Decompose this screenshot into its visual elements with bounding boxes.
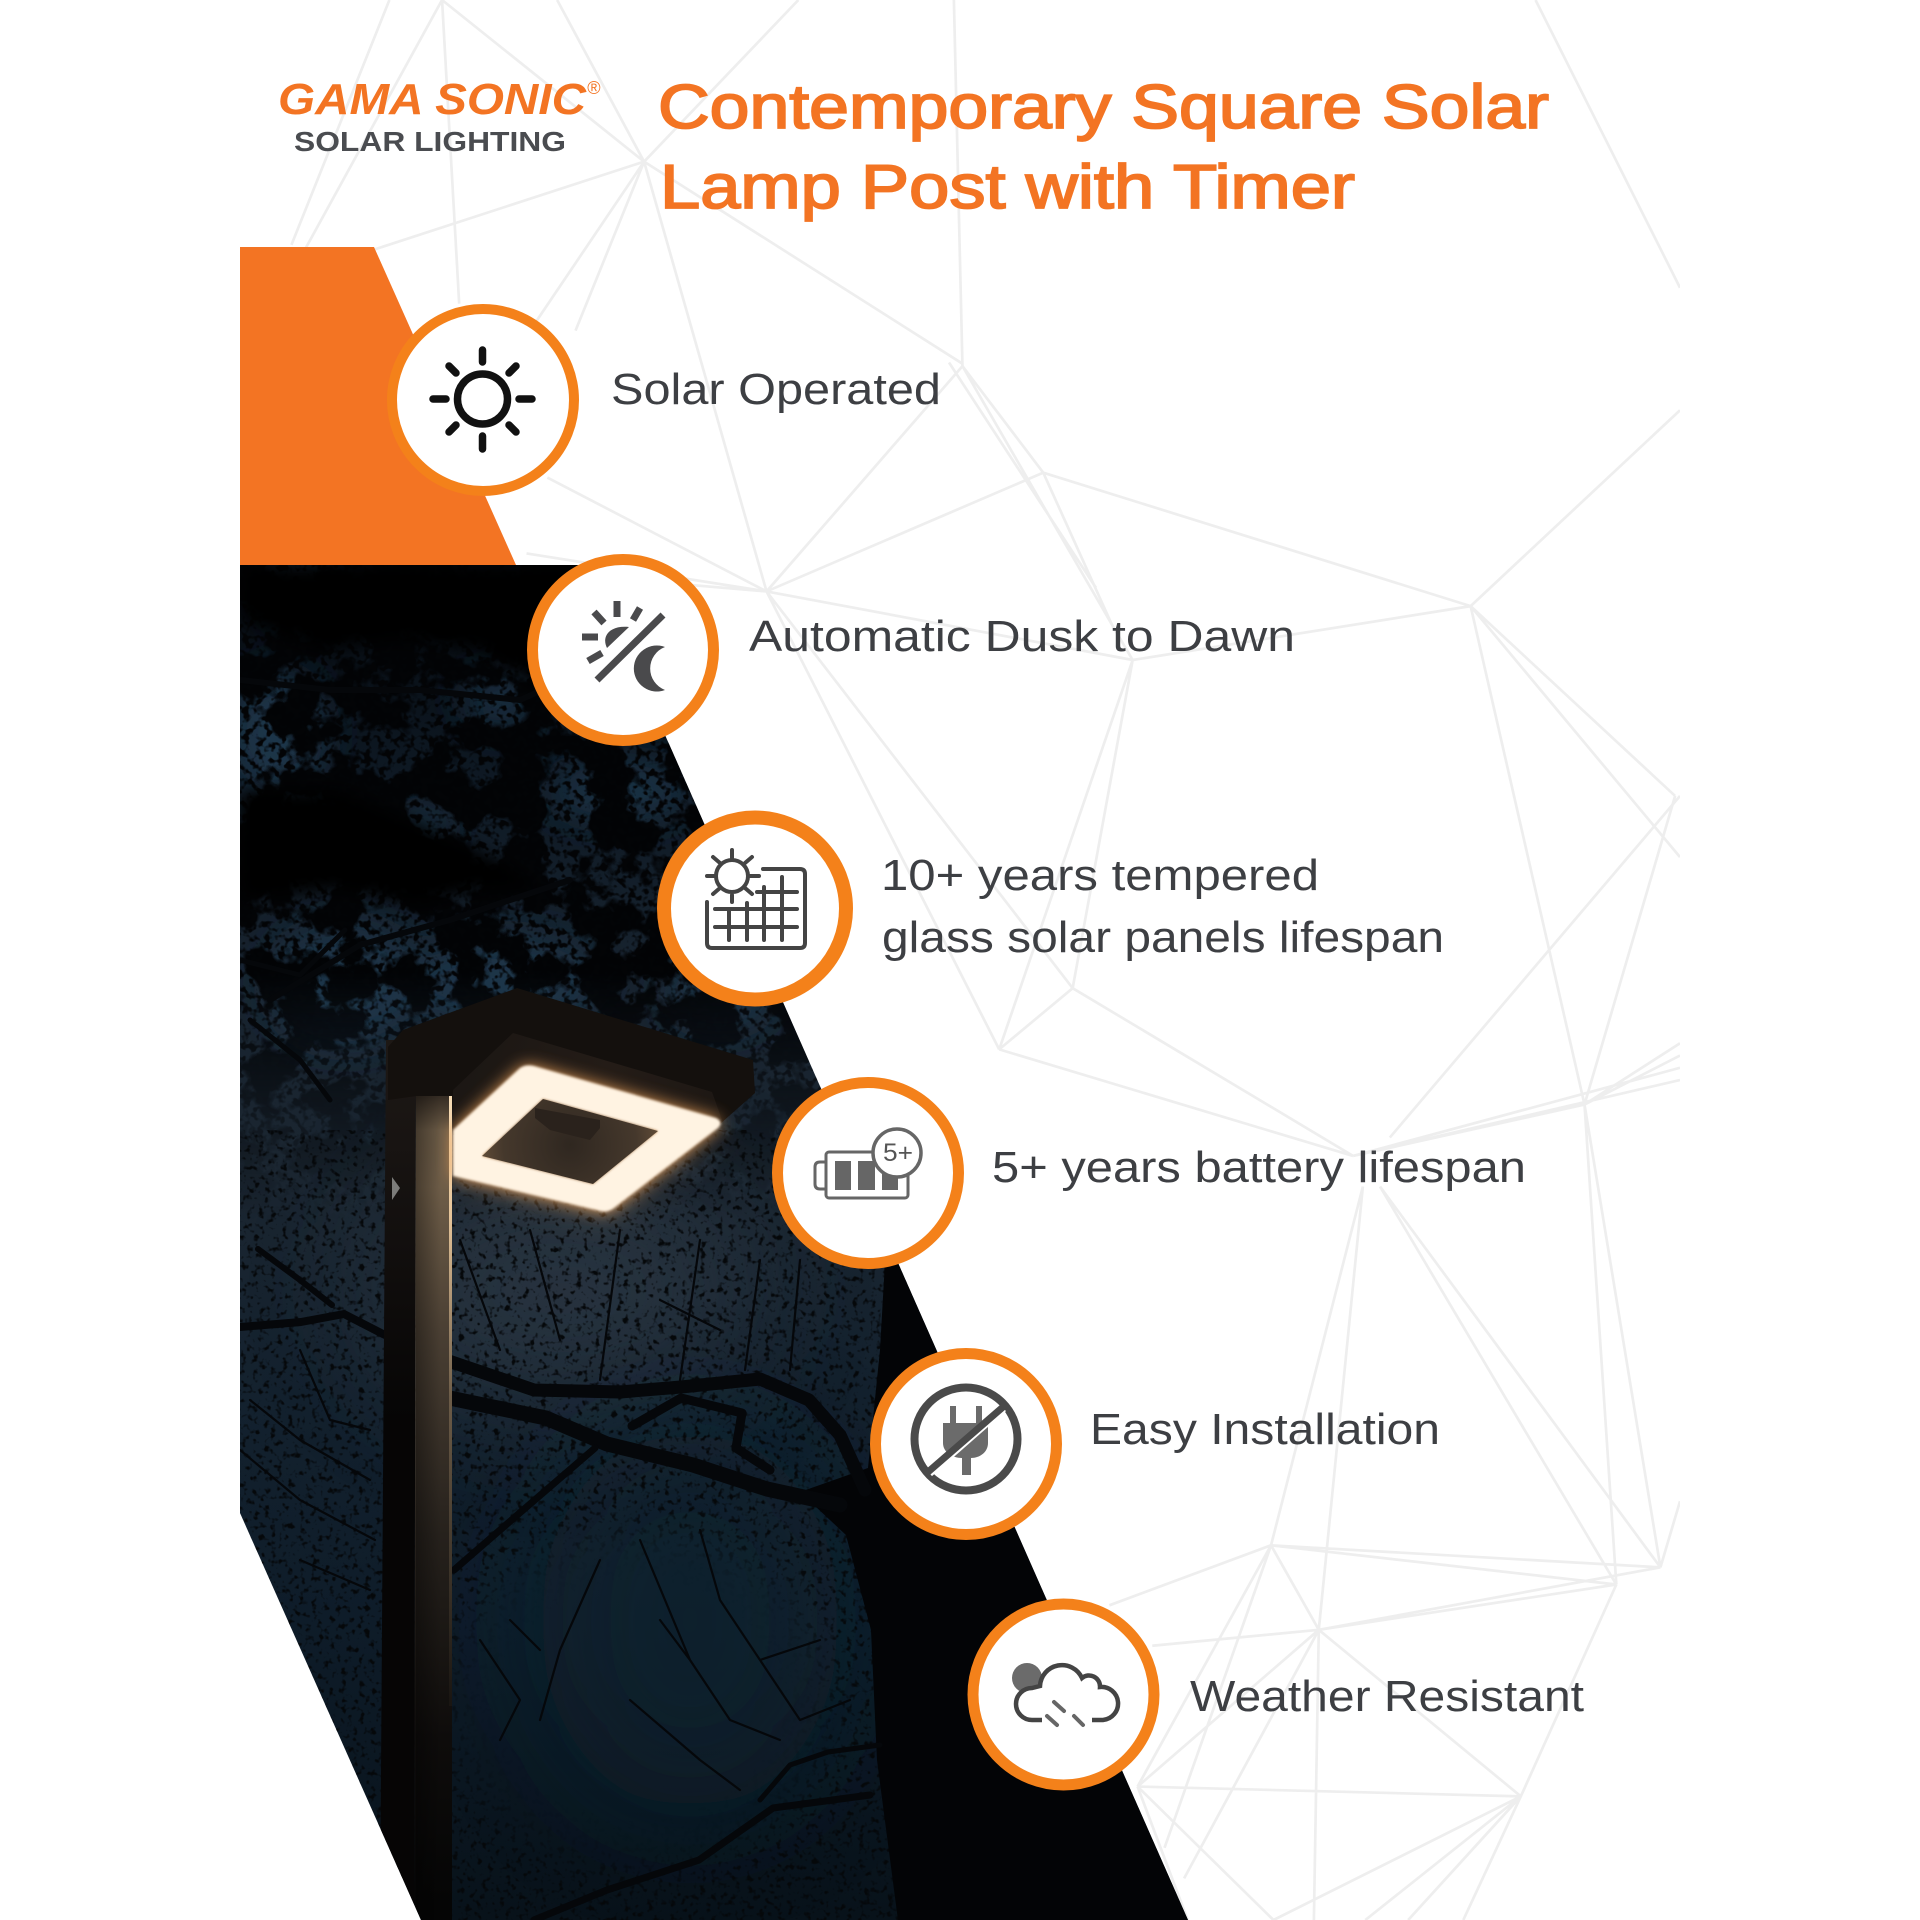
feature: solar panel lifespan — [664, 818, 1444, 1000]
icon: sun and moon — [582, 601, 665, 692]
title: Contemporary Square Solar — [658, 73, 1549, 142]
feature: automatic dusk to dawn: Automatic Dusk to Dawn — [749, 612, 1295, 661]
title — [658, 73, 1549, 222]
brand logo — [278, 75, 601, 157]
lamp glow on sky — [452, 1110, 719, 1226]
icon: rain cloud — [1012, 1663, 1118, 1725]
lamp head underside — [456, 1034, 720, 1116]
feature: solar operated — [392, 309, 941, 491]
icon: battery with 5+ badge: 5+ — [883, 1139, 913, 1167]
tree foliage texture — [240, 565, 1000, 1920]
icon: no plug — [914, 1388, 1018, 1490]
background network pattern — [291, 0, 1680, 1920]
feature: easy installation — [876, 1354, 1440, 1534]
feature: automatic dusk to dawn — [532, 560, 1295, 740]
tree branches — [240, 660, 880, 1920]
icon: battery with 5+ badge — [815, 1129, 921, 1198]
infographic canvas — [240, 0, 1680, 1920]
pole dark side — [380, 1040, 416, 1920]
brand logo: GAMA SONIC — [278, 75, 587, 124]
photo sky — [227, 564, 1200, 1920]
lamp light ring — [453, 1065, 721, 1212]
icon: solar panel with sun — [707, 850, 805, 948]
feature: weather resistant — [973, 1604, 1584, 1785]
lamp head housing — [388, 988, 755, 1140]
feature: solar panel lifespan: glass solar panels lifespan — [882, 913, 1444, 962]
feature: solar panel lifespan: 10+ years tempered — [881, 851, 1319, 900]
feature: battery lifespan — [778, 1082, 1526, 1264]
photo panel: lamp post at dusk — [227, 564, 1200, 1920]
pole lit side — [414, 1090, 452, 1920]
brand logo: SOLAR LIGHTING — [294, 126, 566, 157]
title: Lamp Post with Timer — [660, 153, 1355, 222]
icon: sun — [433, 350, 532, 449]
orange header panel — [240, 247, 516, 565]
tree trunk and dark canopy — [240, 565, 1200, 1920]
pole marker — [392, 1177, 400, 1200]
inner square — [482, 1099, 658, 1184]
feature: easy installation: Easy Installation — [1090, 1405, 1440, 1454]
lamp post — [380, 1040, 452, 1920]
feature: battery lifespan: 5+ years battery lifespan — [992, 1143, 1526, 1192]
feature: weather resistant: Weather Resistant — [1190, 1672, 1584, 1721]
brand logo: ® — [587, 78, 601, 98]
feature: solar operated: Solar Operated — [611, 365, 941, 414]
